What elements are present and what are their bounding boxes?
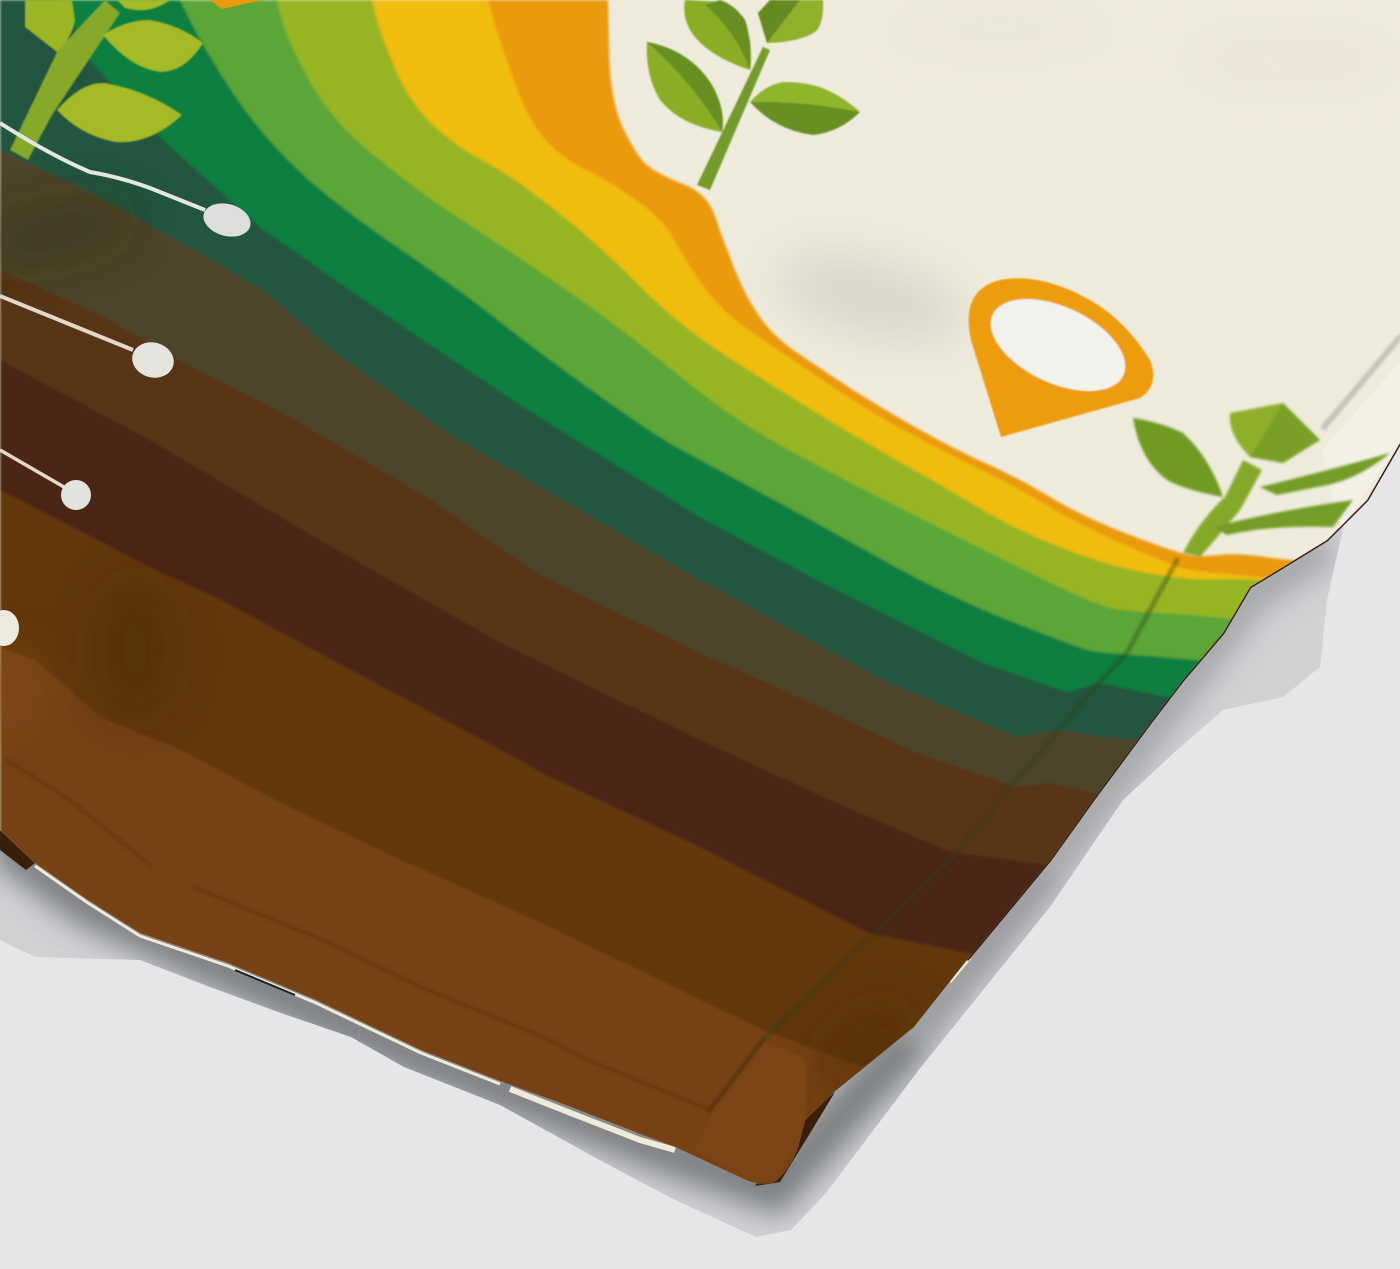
band: yellow: [372, 0, 1266, 581]
hem corner: [713, 1050, 805, 1122]
left underside fold: [0, 830, 35, 870]
corner underside: [755, 1092, 835, 1186]
icon: left plant sprig: [10, 0, 203, 160]
hem stitching: [7, 337, 1400, 1110]
marker line 1: [0, 123, 254, 242]
marker line 2: [0, 296, 178, 382]
cream fabric wrinkles: [780, 247, 960, 349]
band: dark teal: [0, 0, 1170, 741]
band: light brown hem: [0, 648, 864, 1184]
band: brown: [0, 270, 1098, 865]
band: ochre brown: [0, 490, 972, 1066]
band: orange: [486, 0, 1296, 580]
band: mid green: [178, 0, 1232, 663]
icon: right plant sprig: [1133, 403, 1390, 557]
blanket cast shadow: [0, 526, 1344, 1237]
band: olive brown: [0, 149, 1138, 794]
band: lime green: [276, 0, 1264, 621]
band: dark brown: [0, 361, 1046, 954]
fabric shading: [0, 192, 923, 1108]
blanket edge line: [967, 443, 1400, 960]
marker dot 4: [0, 610, 19, 646]
band: green: [60, 0, 1200, 698]
icon: location pin: [969, 278, 1153, 437]
icon: clipped orange shape: [210, 0, 262, 9]
icon: centre plant sprig: [647, 0, 860, 190]
marker line 3: [0, 450, 91, 510]
cream underside strip: [35, 866, 970, 1150]
cream folded edge: [1322, 362, 1400, 530]
